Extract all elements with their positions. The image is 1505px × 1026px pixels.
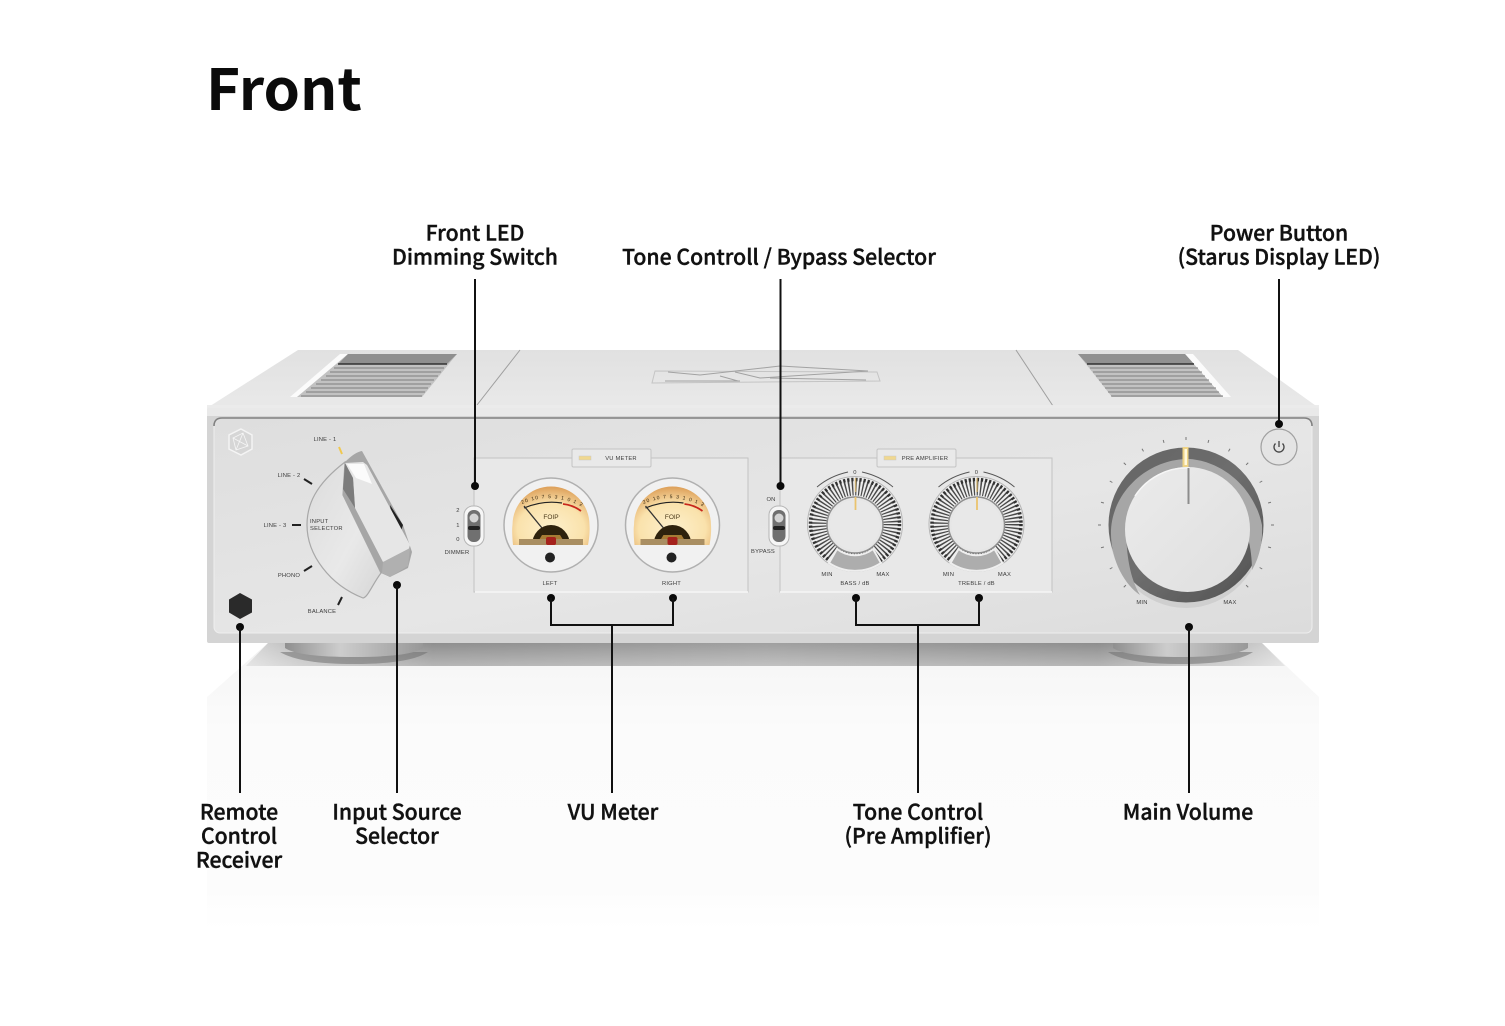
callout: power button: (Starus Display LED) — [1178, 240, 1380, 272]
callout: tone control pre amplifier: (Pre Amplifier) — [844, 820, 992, 850]
callout: VU meter: VU Meter — [567, 796, 659, 826]
left heat vent — [290, 354, 457, 397]
bypass switch: ON — [766, 497, 776, 503]
callout: VU meter — [547, 594, 677, 826]
main volume knob: MAX — [1223, 600, 1237, 606]
callout: input source selector: Input Source — [332, 796, 462, 826]
left foot — [280, 643, 428, 664]
underside shadow — [246, 643, 1285, 666]
pre amplifier label tab — [877, 449, 956, 467]
VU meter label tab — [572, 449, 651, 467]
left VU meter: LEFT — [543, 581, 558, 587]
callout: remote control receiver — [196, 623, 282, 874]
input selector knob — [307, 451, 412, 598]
input selector scale — [264, 437, 342, 615]
input selector scale: PHONO — [278, 573, 300, 579]
left VU meter — [326, 365, 638, 602]
remote control receiver — [229, 593, 252, 619]
left VU meter: 20 10 7 5 3 1 0 1 2 3 — [521, 494, 582, 506]
bass knob — [808, 470, 902, 587]
VU meter panel — [326, 365, 764, 602]
power button — [1261, 429, 1297, 465]
dimmer switch: 1 — [456, 523, 460, 529]
right VU meter: RIGHT — [662, 581, 681, 587]
input selector scale: LINE - 3 — [264, 523, 286, 529]
bass knob: MIN — [821, 572, 833, 578]
callout: tone control bypass selector — [622, 240, 936, 490]
bass knob: 0 — [853, 470, 857, 476]
callout: remote control receiver: Remote — [200, 796, 278, 826]
right VU meter — [624, 477, 720, 587]
engraved top logo — [652, 366, 880, 383]
treble knob — [929, 470, 1024, 587]
callout: input source selector: Selector — [355, 820, 439, 850]
callout: remote control receiver: Receiver — [196, 844, 282, 874]
treble knob: MAX — [998, 572, 1011, 578]
callout: tone control bypass selector: Tone Controll / Bypass Selector — [622, 240, 936, 272]
input selector scale: LINE - 2 — [278, 473, 300, 479]
callout: tone control pre amplifier — [844, 594, 992, 850]
VU meter label tab: VU METER — [605, 456, 637, 462]
treble knob: MIN — [943, 572, 954, 578]
callout: power button — [1178, 216, 1380, 428]
title: Front — [206, 45, 362, 127]
callout: remote control receiver: Control — [201, 820, 277, 850]
treble knob: 0 — [975, 470, 978, 476]
chassis front frame — [207, 408, 1319, 643]
bypass switch — [751, 497, 789, 555]
callout: input source selector — [332, 581, 462, 850]
front panel — [214, 418, 1312, 633]
main volume knob: MIN — [1136, 600, 1148, 606]
floor reflection — [207, 643, 1319, 930]
callout: front LED dimming switch: Front LED — [426, 216, 524, 248]
dimmer switch — [445, 506, 484, 556]
bass knob: BASS / dB — [840, 581, 870, 587]
right VU meter: 20 10 7 5 3 1 0 1 2 3 — [642, 494, 704, 506]
dimmer switch: 2 — [456, 508, 460, 514]
input selector knob: SELECTOR — [310, 526, 343, 532]
main volume knob — [1108, 447, 1264, 608]
pre amplifier panel — [780, 449, 1052, 592]
input selector knob: INPUT — [310, 519, 329, 525]
main volume scale ticks — [1098, 437, 1274, 587]
treble knob: TREBLE / dB — [958, 581, 995, 587]
right heat vent — [1078, 354, 1231, 397]
chassis top — [207, 350, 1319, 408]
right foot — [1108, 643, 1253, 664]
bypass switch: BYPASS — [751, 549, 775, 555]
pre amplifier label tab: PRE AMPLIFIER — [902, 456, 948, 462]
callout: front LED dimming switch: Dimming Switch — [392, 240, 558, 272]
dimmer switch: 0 — [456, 537, 460, 543]
right VU meter: FOIP — [665, 514, 680, 521]
callout: tone control pre amplifier: Tone Control — [853, 796, 983, 826]
bass knob: MAX — [876, 572, 890, 578]
amplifier illustration — [207, 350, 1319, 666]
callout: power button: Power Button — [1210, 216, 1348, 248]
top centre cover seams — [477, 350, 1053, 406]
input selector scale: LINE - 1 — [314, 437, 336, 443]
callout: main volume — [1123, 623, 1253, 826]
left VU meter: FOIP — [543, 514, 559, 521]
input selector scale: BALANCE — [308, 609, 336, 615]
callout: front LED dimming switch — [392, 216, 558, 490]
brand logo — [229, 429, 252, 455]
dimmer switch: DIMMER — [445, 550, 469, 556]
callout: main volume: Main Volume — [1123, 796, 1253, 826]
